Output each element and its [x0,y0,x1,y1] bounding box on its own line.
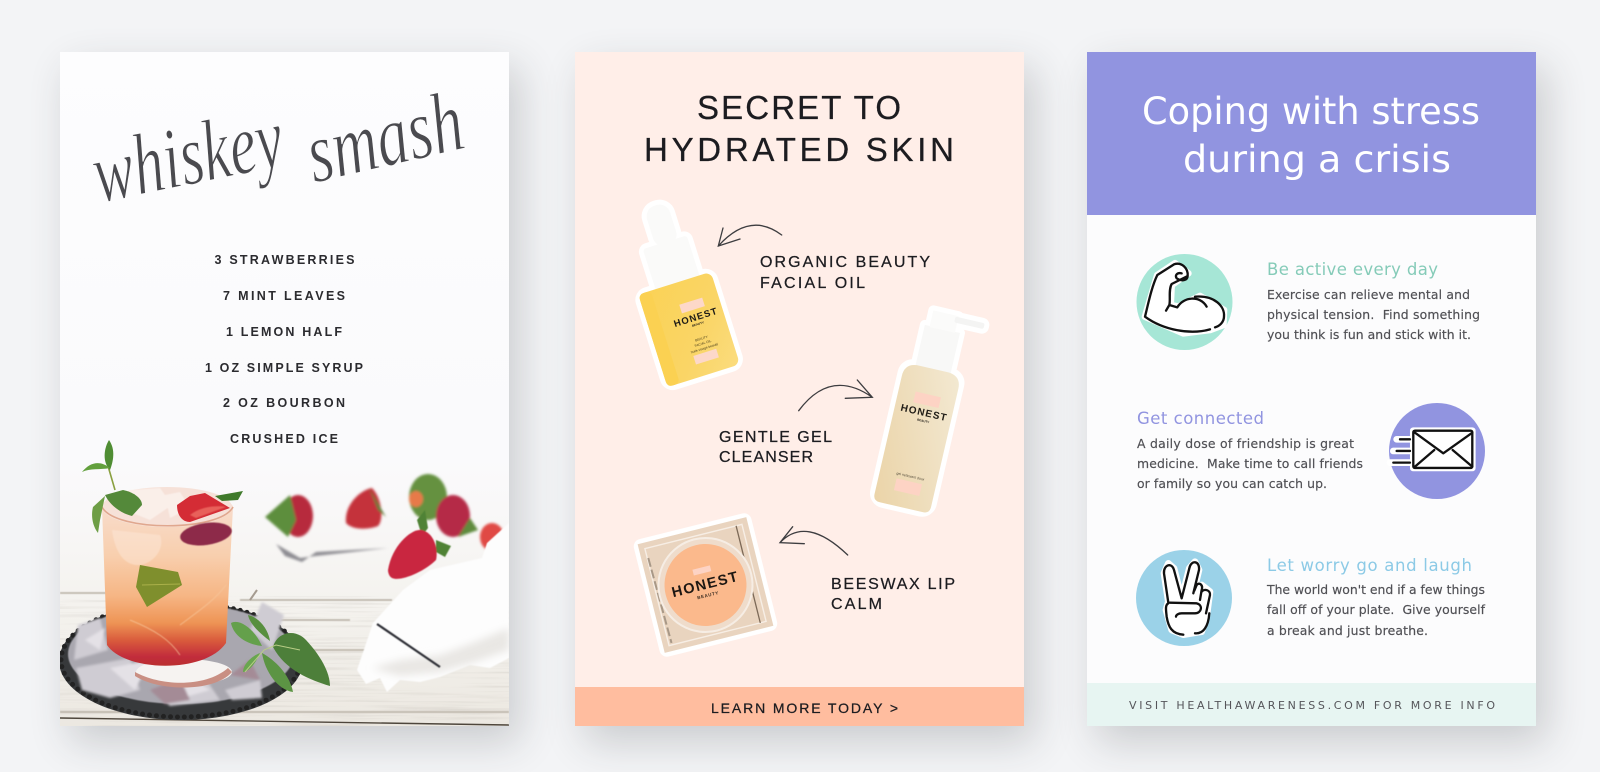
label: lip balm: BEESWAX LIP [831,576,955,593]
product: facial oil bottle: BEAUTY [695,335,709,343]
footer bar: visit site: VISIT HEALTHAWARENESS.COM FOR MORE INFO [1129,699,1495,712]
product: beeswax lip balm: HONEST [670,569,741,601]
footer bar: visit site [1087,683,1536,726]
label: gel cleanser: CLEANSER [719,449,813,466]
tip: let worry go: The world won't end if a few things [1266,582,1485,597]
tip: get connected: Get connected [1137,409,1264,428]
photo: background strawberries [265,474,504,562]
product: gel cleanser bottle [873,307,985,516]
photo: front strawberry [388,510,451,579]
label: facial oil [760,254,930,292]
product: facial oil bottle [614,195,740,387]
label: lip balm [831,576,955,613]
ingredients list: 1 LEMON HALF [226,325,342,339]
tip: be active [1267,260,1480,342]
heading: SECRET TO [697,89,901,126]
title [83,72,472,222]
ingredients list: CRUSHED ICE [230,432,338,446]
product: facial oil bottle: FACIAL OIL [694,339,712,348]
label: lip balm: CALM [831,596,882,613]
arrow: to gel cleanser [799,380,872,411]
icon: peace hand [1136,550,1232,646]
product: facial oil bottle: HONEST [673,306,719,330]
header banner: during a crisis [1183,138,1451,181]
label: gel cleanser: GENTLE GEL [719,429,832,446]
label: gel cleanser [719,429,832,466]
tip: be active: you think is fun and stick with it. [1267,327,1471,342]
tip: let worry go: fall off of your plate. Give yourself [1267,602,1486,617]
heading: HYDRATED SKIN [644,131,954,168]
tip: let worry go [1266,556,1486,638]
tip: be active: physical tension. Find something [1267,307,1480,322]
header banner: Coping with stress [1142,90,1480,133]
title: smash [297,72,472,202]
tip: be active: Be active every day [1267,260,1438,279]
arrow: to lip balm [780,527,848,555]
header banner [1087,52,1536,215]
product: beeswax lip balm [638,517,773,653]
panel: coping with stress [1087,52,1536,726]
icon: envelope [1389,403,1485,499]
photo: cocktail glass [102,487,243,688]
product: beeswax lip balm: BEAUTY [697,590,719,600]
photo: linen napkin [357,523,509,692]
label: facial oil: FACIAL OIL [760,275,865,292]
tip: get connected: medicine. Make time to call friends [1137,456,1363,471]
label: facial oil: ORGANIC BEAUTY [760,254,930,271]
ingredients list: 2 OZ BOURBON [223,396,345,410]
photo: mint sprig on glass [82,440,142,533]
photo: mint leaves on plate [231,615,330,692]
title: whiskey [83,88,292,222]
tip: get connected: or family so you can catch up. [1137,476,1327,491]
panel: secret to hydrated skin [575,52,1024,726]
icon: flexed arm [1136,254,1232,350]
ingredients list [205,253,363,446]
product: facial oil bottle: huile visage beauté [690,342,719,354]
tip: get connected [1137,409,1363,491]
product: gel cleanser bottle: gel nettoyant doux [896,471,925,482]
tip: let worry go: Let worry go and laugh [1267,556,1472,575]
photo: plate of ice [59,602,303,720]
footer bar: learn more: LEARN MORE TODAY > [711,700,898,716]
footer bar: learn more [575,687,1024,726]
ingredients list: 7 MINT LEAVES [223,289,345,303]
arrow: to facial oil [718,225,782,246]
tip: let worry go: a break and just breathe. [1267,623,1428,638]
photo: wooden table [60,590,509,726]
panel: whiskey smash recipe [60,52,509,726]
tip: get connected: A daily dose of friendship is great [1137,436,1354,451]
product: facial oil bottle: BEAUTY [691,320,704,328]
product: gel cleanser bottle: HONEST [899,403,948,424]
ingredients list: 1 OZ SIMPLE SYRUP [205,361,363,375]
heading [644,89,954,168]
tip: be active: Exercise can relieve mental and [1267,287,1470,302]
ingredients list: 3 STRAWBERRIES [214,253,354,267]
product: gel cleanser bottle: BEAUTY [917,418,930,424]
